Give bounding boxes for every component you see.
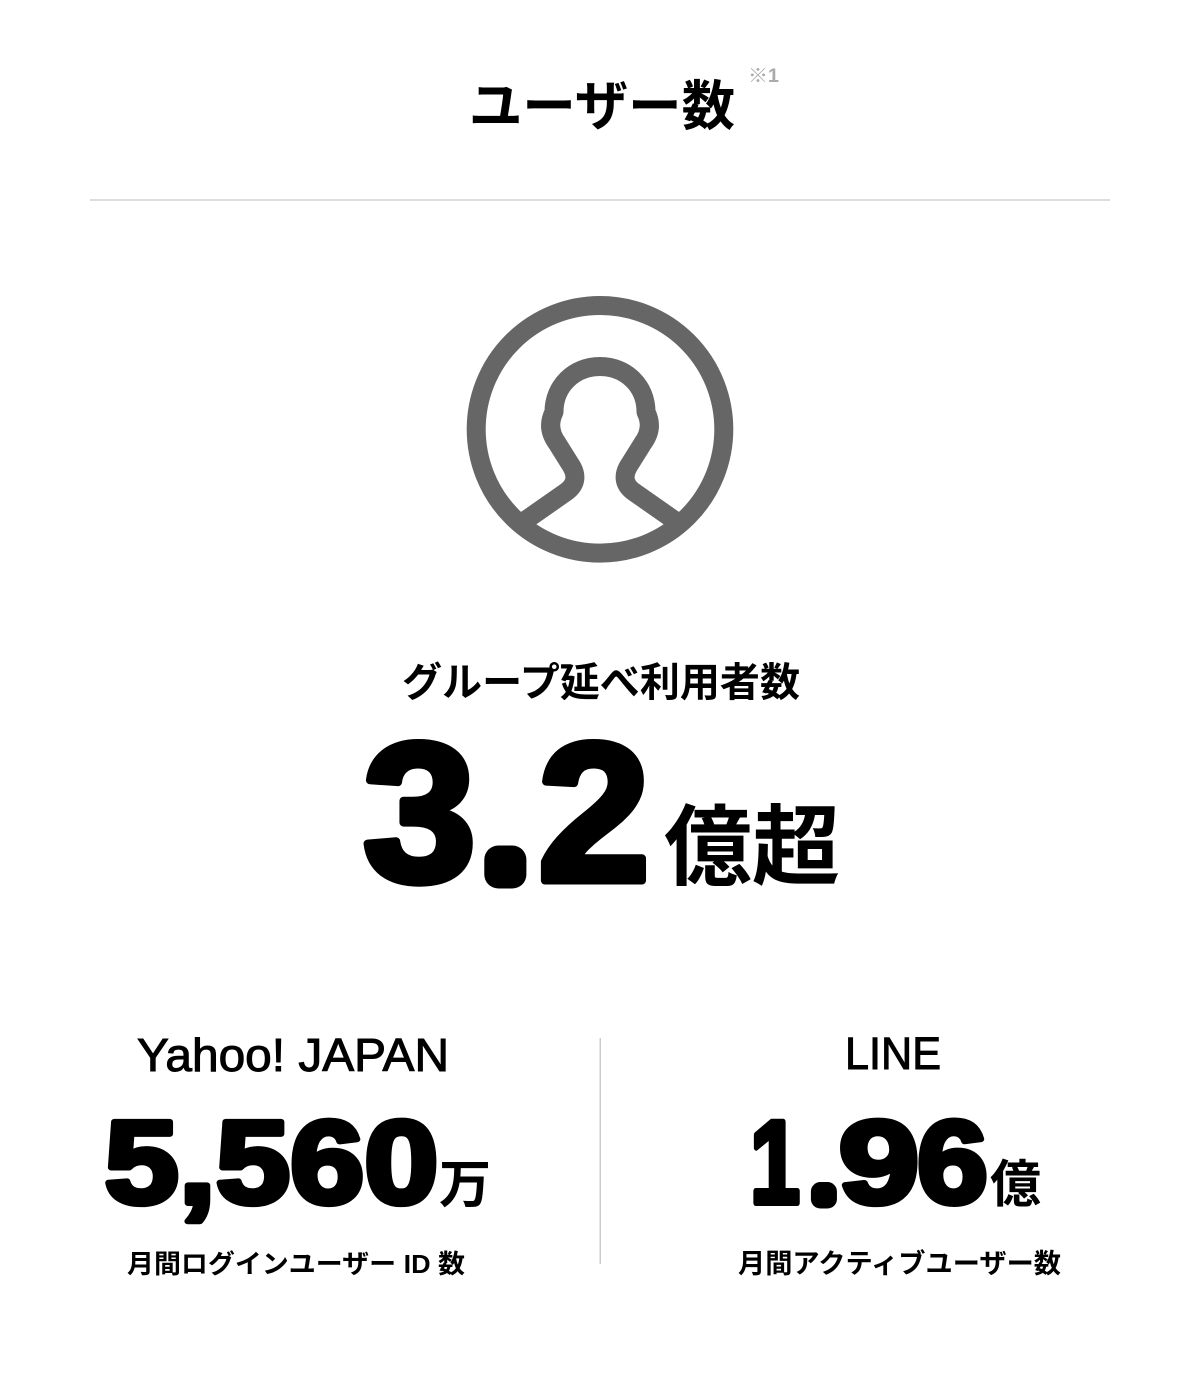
figure: 1.96: . [817, 1154, 831, 1210]
figure: 1.96: 9 [839, 1097, 919, 1229]
main figure: 3.2: . [492, 784, 519, 896]
icon: user silhouette in circle [476, 306, 724, 553]
main figure: 3.2: 3 [363, 702, 476, 922]
label: group total users: グループ延べ利用者数 [402, 661, 800, 705]
group total users block [363, 661, 840, 922]
panel: Yahoo! JAPAN [104, 1029, 491, 1279]
unit: 万: 万 [439, 1157, 491, 1215]
main figure: 3.2 [363, 702, 650, 922]
figure: 1.96 [750, 1097, 988, 1229]
footnote marker: ※1 [748, 66, 779, 87]
heading: LINE: LINE [845, 1028, 941, 1079]
figure: 5,560: 5,560 [104, 1097, 438, 1229]
caption: monthly login user IDs: 月間ログインユーザー ID 数 [127, 1249, 465, 1279]
figure: 1.96: 1 [750, 1097, 800, 1229]
panel: LINE [738, 1028, 1061, 1279]
title: user count: ユーザー数 [469, 77, 735, 137]
unit: 億超: 億超 [664, 798, 840, 897]
unit: 億: 億 [990, 1156, 1041, 1213]
main figure: 3.2: 2 [538, 702, 650, 922]
caption: monthly active users: 月間アクティブユーザー数 [738, 1248, 1061, 1279]
figure: 1.96: 6 [917, 1097, 988, 1229]
heading: Yahoo! JAPAN: Yahoo! JAPAN [137, 1029, 449, 1081]
